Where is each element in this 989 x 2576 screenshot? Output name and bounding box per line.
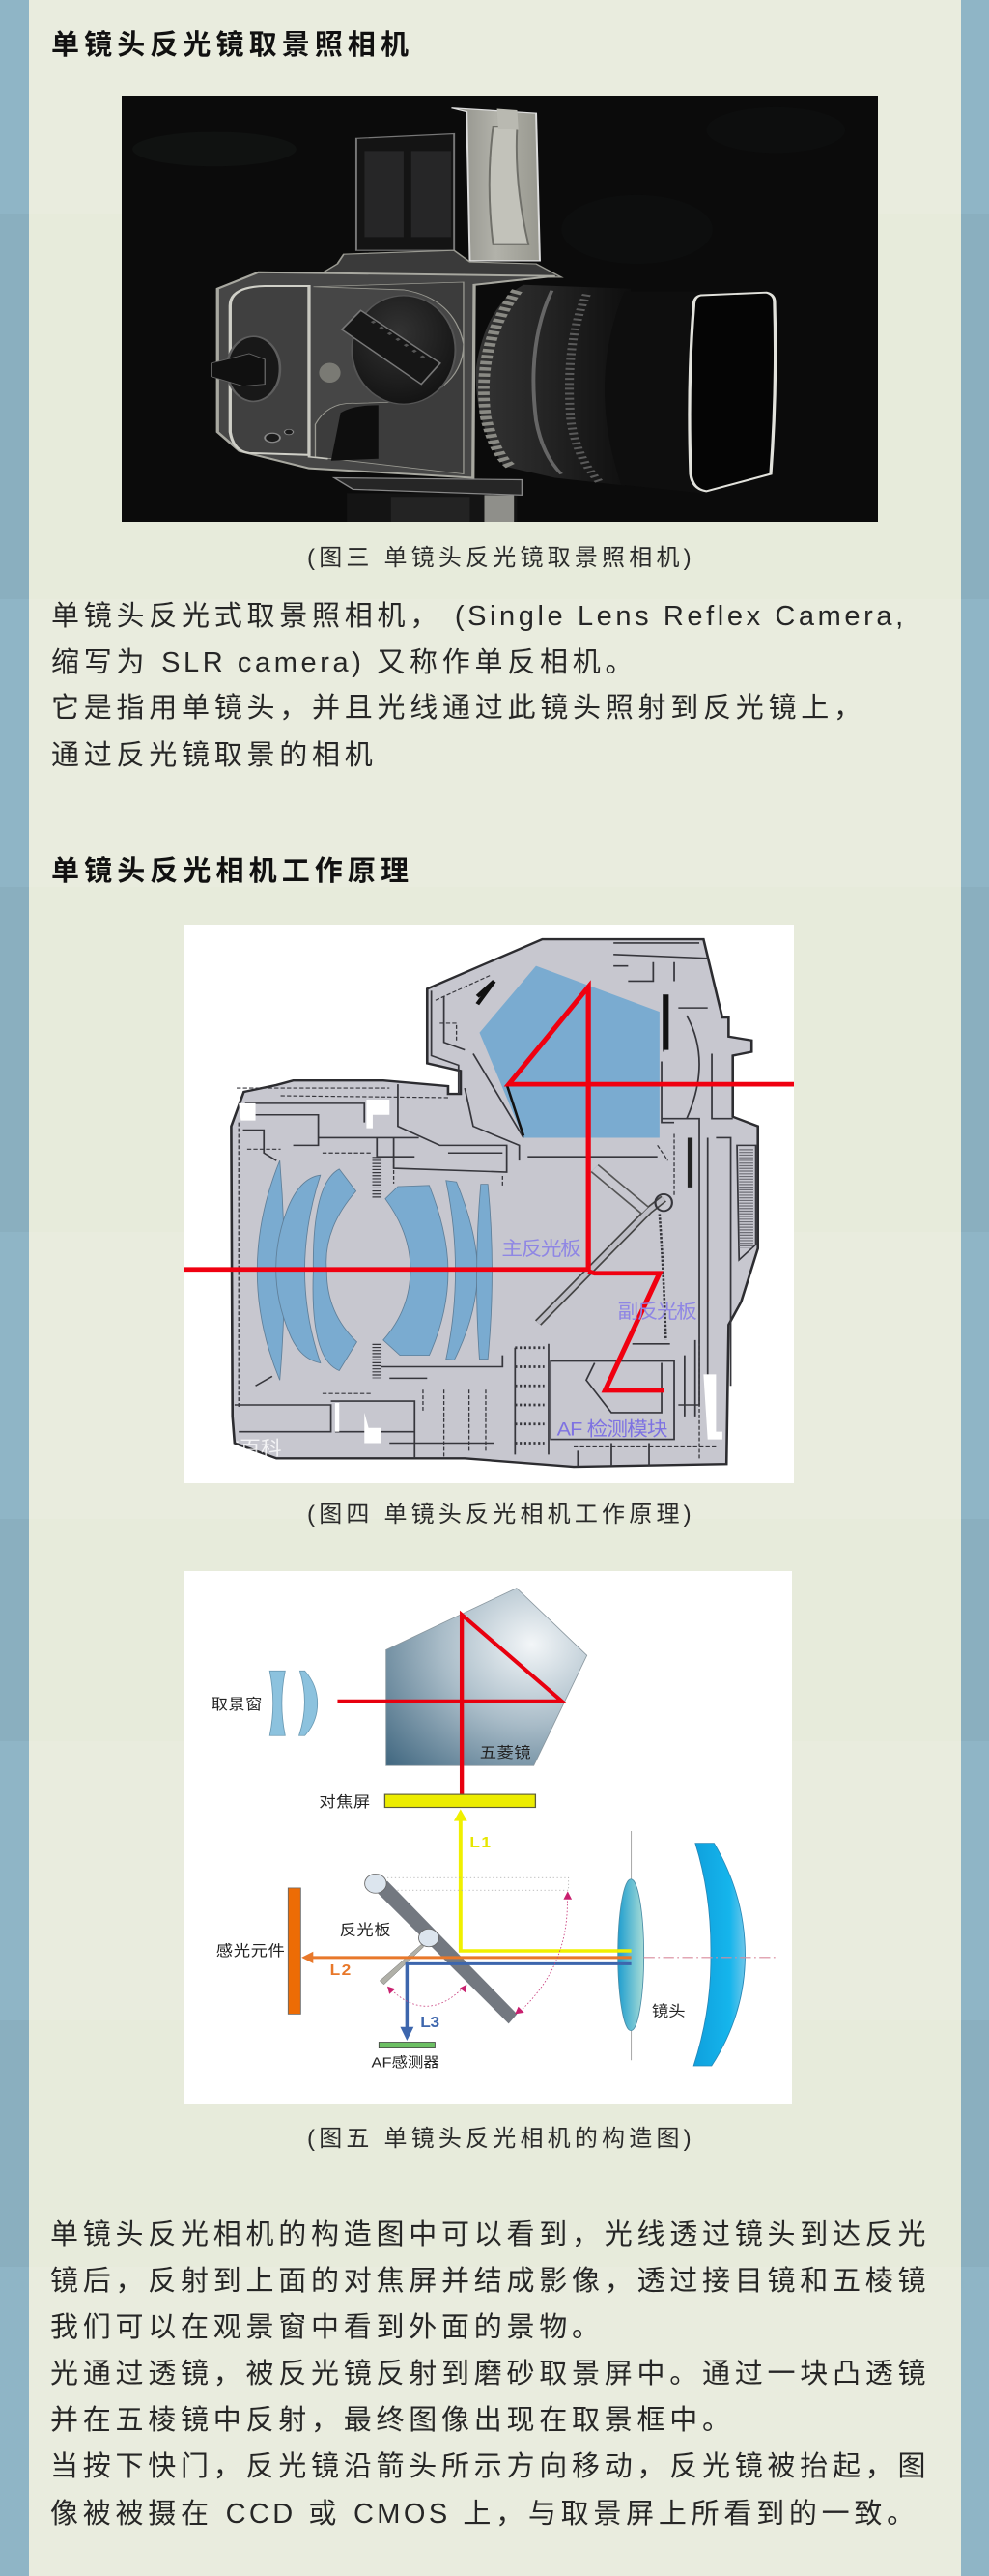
AF sensor [379,2042,435,2048]
watermark: Bai百科 [210,1438,281,1459]
light path in red [184,987,794,1390]
label: focus screen: 对焦屏 [319,1794,370,1811]
caption: figure 4: (图四 单镜头反光相机工作原理) [307,1502,695,1528]
camera section outline [231,939,758,1467]
meniscus lens [693,1844,745,2066]
sub mirror [380,1944,424,1985]
paragraph: how the SLR works: 并在五棱镜中反射，最终图像出现在取景框中。 [50,2405,735,2436]
optical axis [644,1956,778,1959]
orange ray L2 [301,1952,632,1979]
label: AF sensor: AF感测器 [372,2054,439,2071]
paragraph: SLR definition: 它是指用单镜头，并且光线通过此镜头照射到反光镜上， [51,693,866,724]
red light path [337,1615,562,1794]
paragraph: how the SLR works [50,2219,930,2530]
paragraph: how the SLR works: 像被被摄在 CCD 或 CMOS 上，与取景屏上所看到的一致。 [50,2499,919,2530]
paragraph: SLR definition [51,601,907,771]
lens elements [257,1160,492,1380]
label: mirror: 反光板 [340,1922,390,1938]
label: main mirror: 主反光板 [501,1239,581,1260]
paragraph: how the SLR works: 当按下快门，反光镜沿箭头所示方向移动，反光镜被抬起，图 [50,2451,930,2482]
caption: figure 5: (图五 单镜头反光相机的构造图) [307,2126,695,2152]
heading: SLR viewfinder camera: 单镜头反光镜取景照相机 [51,30,413,61]
yellow ray L1: L1 [469,1835,491,1851]
paragraph: how the SLR works: 单镜头反光相机的构造图中可以看到，光线透过镜头到达反光 [50,2219,930,2250]
white highlights [239,1100,722,1444]
caption: figure 3: (图三 单镜头反光镜取景照相机) [307,545,695,571]
label: lens: 镜头 [652,2002,686,2019]
winding knob [342,296,455,404]
paragraph: SLR definition: 单镜头反光式取景照相机， (Single Lens Reflex Camera, [51,601,907,632]
camera top plate [315,250,561,277]
lens front [631,1831,633,2060]
pentaprism [479,966,660,1137]
waist level finder [356,108,540,261]
focus screen [384,1794,535,1808]
paragraph: how the SLR works: 我们可以在观景窗中看到外面的景物。 [50,2312,605,2343]
diagram: SLR structure [184,1571,792,2104]
diagram: SLR cross-section with light path [184,925,794,1483]
image sensor [288,1888,300,2014]
blue ray L3: L3 [420,2015,439,2031]
ray ends over lens [617,1946,632,1955]
dotted guides [376,1877,569,1890]
paragraph: how the SLR works: 光通过透镜，被反光镜反射到磨砂取景屏中。通过一块凸透镜 [50,2359,930,2390]
pentaprism [386,1589,587,1765]
yellow ray L1 [454,1809,632,1951]
label: sensor: 感光元件 [216,1943,285,1960]
main mirror [365,1874,517,2023]
mirror motion arrows [387,1891,572,2014]
tripod [347,493,517,522]
paragraph: SLR definition: 缩写为 SLR camera) 又称作单反相机。 [51,647,637,678]
label: viewfinder: 取景窗 [212,1697,262,1713]
paragraph: how the SLR works: 镜后，反射到上面的对焦屏并结成影像，透过接目镜和五棱镜 [50,2266,930,2297]
blue ray L3 [400,1963,632,2041]
eyepiece lenses [269,1671,318,1735]
mechanism details [235,943,756,1466]
label: pentaprism: 五菱镜 [480,1744,531,1761]
orange ray L2: L2 [330,1962,351,1979]
paragraph: SLR definition: 通过反光镜取景的相机 [51,740,378,771]
camera body [212,272,555,495]
label: sub mirror: 副反光板 [618,1302,697,1323]
lens barrel [476,285,631,485]
label: AF module: AF 检测模块 [557,1418,668,1440]
heading: working principle: 单镜头反光相机工作原理 [51,856,413,887]
convex lens [618,1879,644,2031]
lens hood [605,292,776,493]
photo: Hasselblad style camera [122,96,878,522]
